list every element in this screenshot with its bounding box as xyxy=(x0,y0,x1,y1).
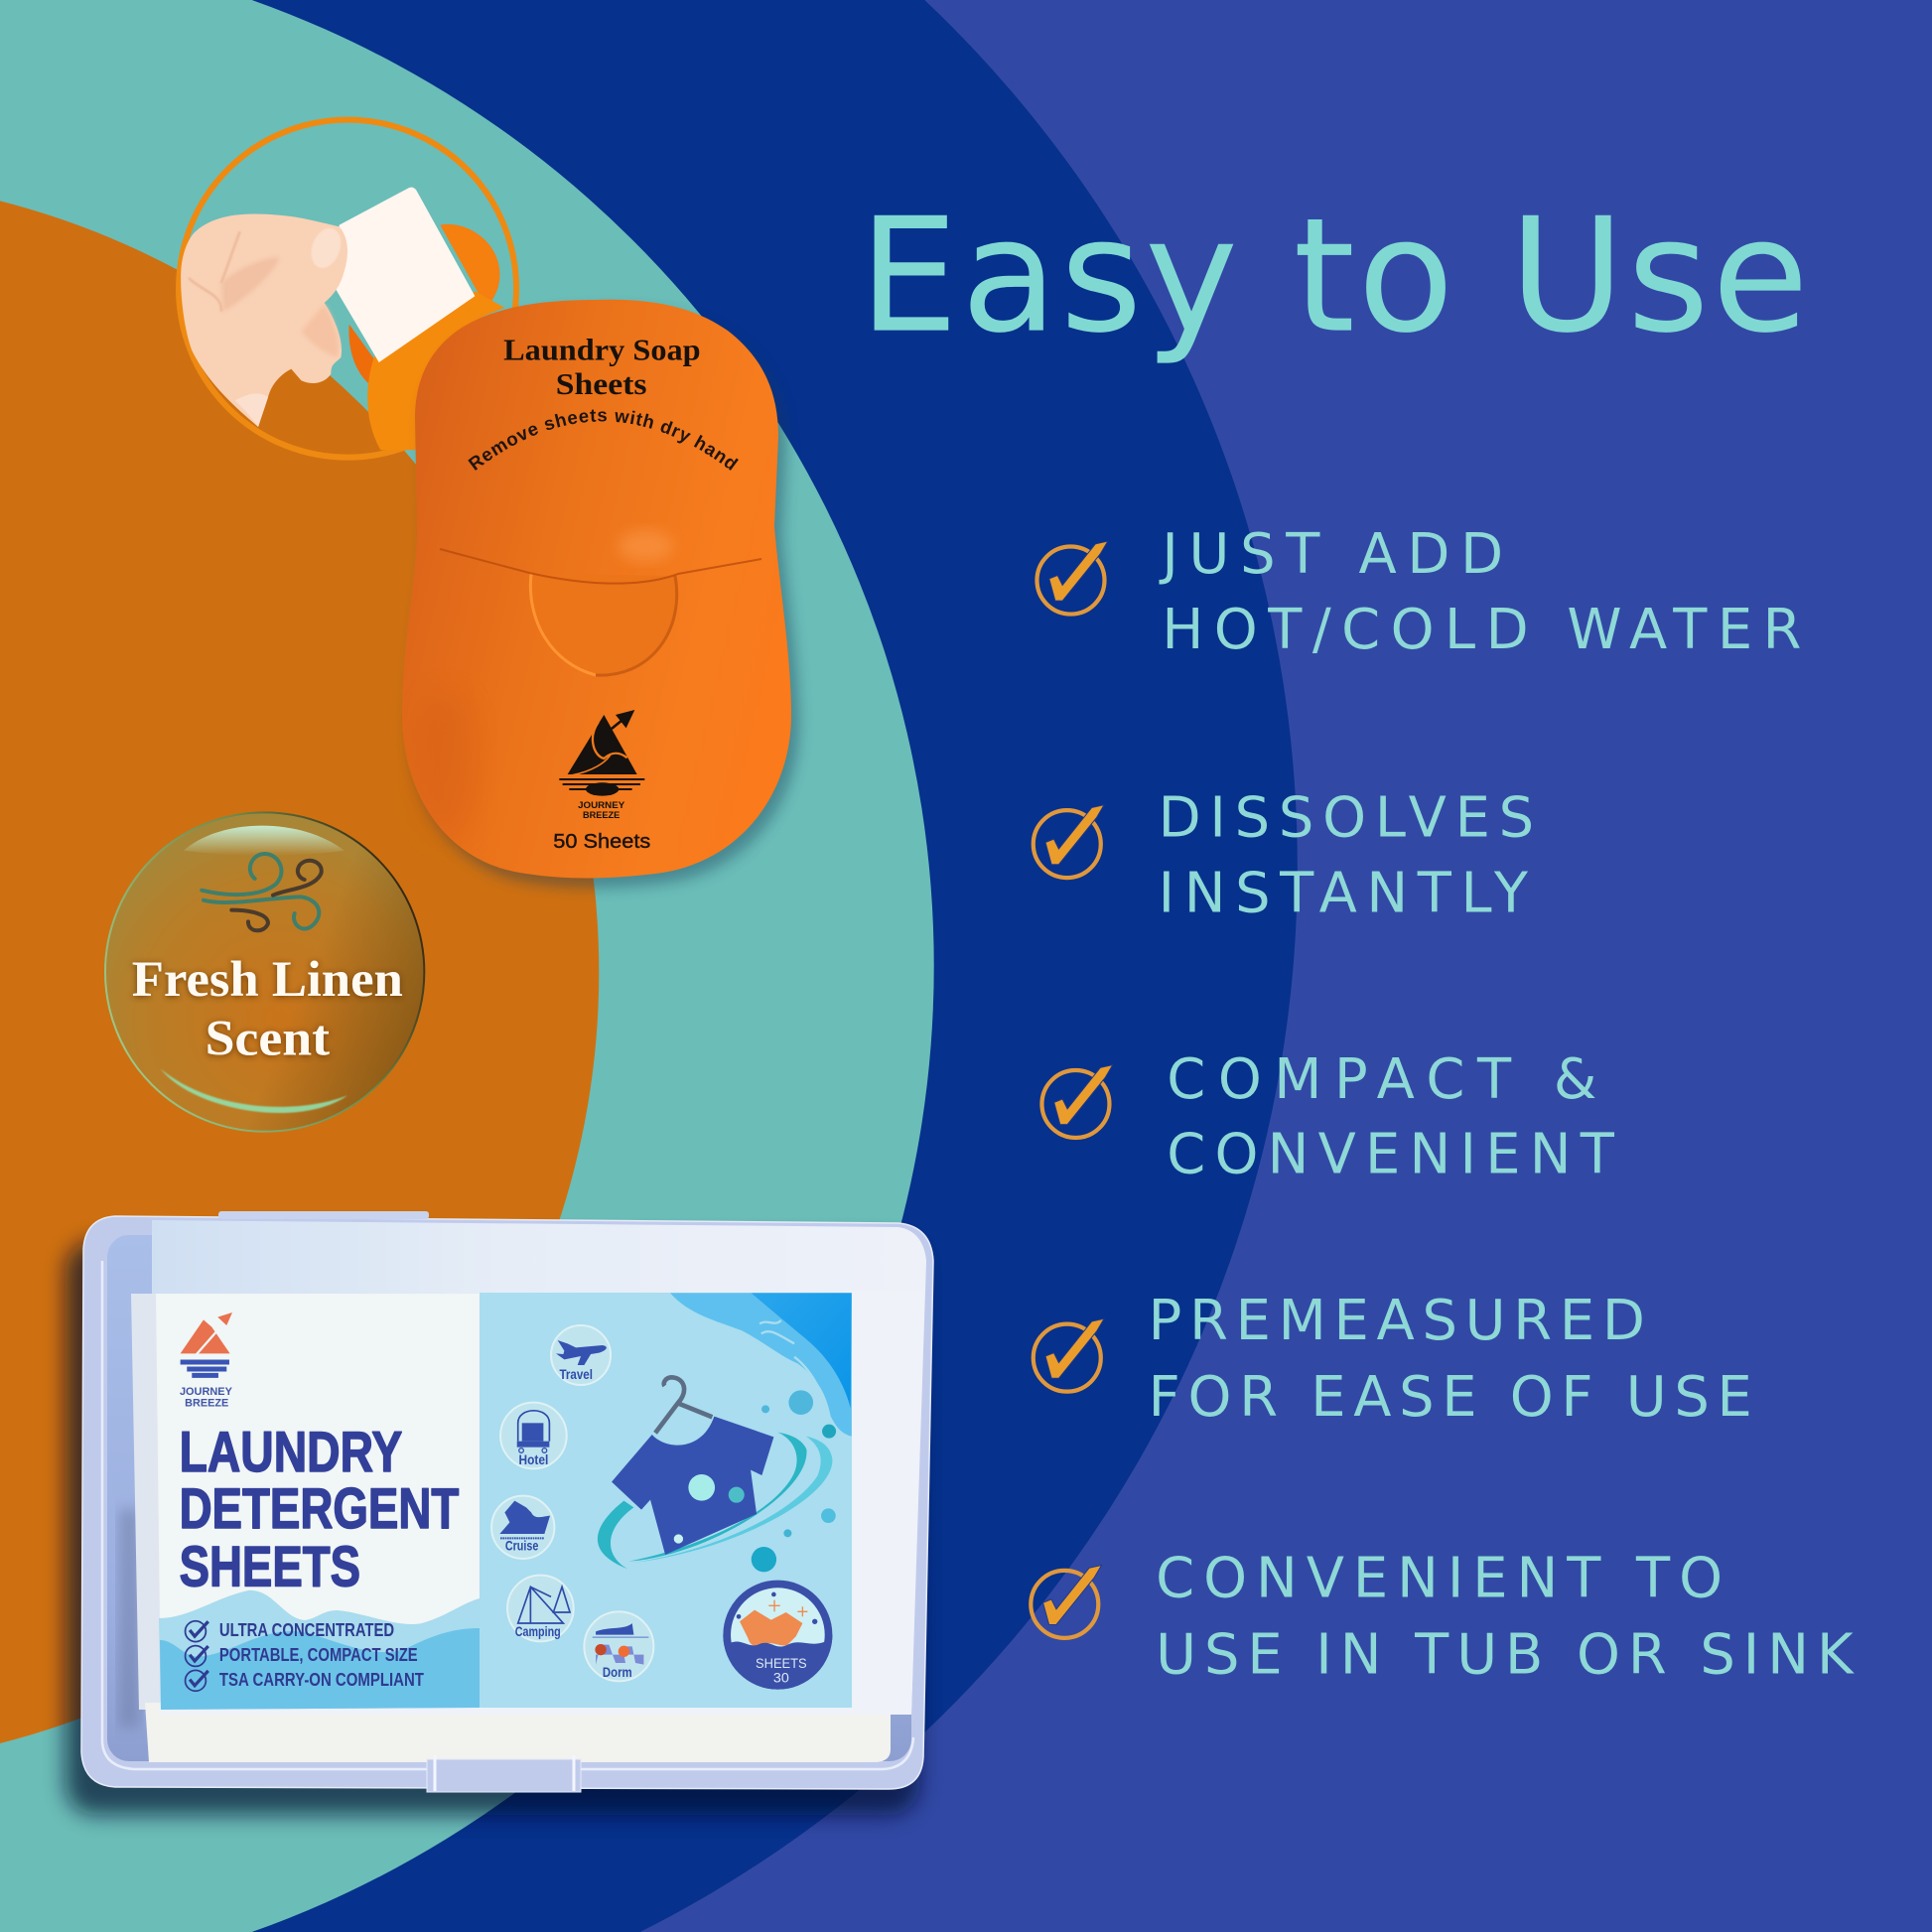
fresh linen scent badge xyxy=(105,812,424,1132)
box heading: SHEETS xyxy=(180,1535,360,1598)
bubble highlights xyxy=(161,826,347,1113)
brand name xyxy=(578,800,625,820)
label right panel xyxy=(480,1293,852,1708)
white sheets xyxy=(131,1220,926,1762)
benefit: premeasured: FOR EASE OF USE xyxy=(1149,1365,1752,1430)
box brand name xyxy=(180,1386,232,1410)
sheet count: 50 Sheets xyxy=(553,830,650,853)
fresh linen scent badge: Scent xyxy=(206,1011,330,1066)
label artwork xyxy=(491,1293,852,1681)
brand name: BREEZE xyxy=(583,810,620,820)
inset ring xyxy=(179,120,516,458)
benefit: compact and convenient: CONVENIENT xyxy=(1167,1122,1615,1186)
use case labels: Dorm xyxy=(603,1665,632,1680)
seal text xyxy=(756,1656,807,1687)
hand xyxy=(181,213,347,427)
box heading: DETERGENT xyxy=(180,1477,459,1541)
use case bubbles xyxy=(491,1325,653,1681)
benefit: compact and convenient xyxy=(1041,1047,1615,1186)
benefit: just add hot/cold water: JUST ADD xyxy=(1159,522,1503,587)
case body xyxy=(402,300,791,879)
label left panel xyxy=(156,1294,480,1710)
box feature list: TSA CARRY-ON COMPLIANT xyxy=(219,1669,424,1690)
orange soap sheet case xyxy=(401,300,806,897)
thumb notch xyxy=(530,574,677,675)
use case labels xyxy=(505,1367,632,1680)
box feature list xyxy=(219,1619,424,1690)
benefit: premeasured xyxy=(1034,1289,1752,1430)
box brand name: JOURNEY xyxy=(180,1386,232,1398)
use case labels: Cruise xyxy=(505,1538,539,1553)
badge disc xyxy=(105,812,424,1132)
box heading: LAUNDRY xyxy=(180,1421,402,1484)
curved instruction: Remove sheets with dry hand xyxy=(468,409,739,471)
t-shirt graphic xyxy=(598,1377,836,1572)
sheets count seal xyxy=(723,1581,832,1690)
benefits list xyxy=(1031,522,1855,1687)
box shadow xyxy=(66,1241,919,1815)
benefit: compact and convenient: COMPACT & xyxy=(1167,1047,1596,1112)
benefit: premeasured: PREMEASURED xyxy=(1149,1289,1645,1353)
box feature list: PORTABLE, COMPACT SIZE xyxy=(219,1644,418,1665)
open case lid xyxy=(348,224,504,450)
orange soap sheet case: Sheets xyxy=(556,366,647,401)
clasp xyxy=(427,1755,581,1792)
box heading xyxy=(180,1421,459,1598)
case label: Laundry Soap xyxy=(503,332,701,366)
benefit: just add hot/cold water: HOT/COLD WATER xyxy=(1162,598,1801,662)
seal text: SHEETS xyxy=(756,1656,807,1672)
benefit: tub or sink: USE IN TUB OR SINK xyxy=(1156,1622,1855,1687)
benefit: dissolves instantly: DISSOLVES xyxy=(1159,786,1534,851)
hand pulling a sheet inset xyxy=(179,120,516,458)
title: Easy to Use xyxy=(859,186,1809,368)
seal text: 30 xyxy=(773,1671,789,1687)
benefit: dissolves instantly xyxy=(1034,786,1534,925)
brand logo xyxy=(559,710,644,796)
water splash xyxy=(670,1293,852,1437)
brand name: JOURNEY xyxy=(578,800,625,810)
use case labels: Hotel xyxy=(518,1452,548,1467)
benefit: tub or sink xyxy=(1031,1546,1855,1687)
use case labels: Camping xyxy=(515,1624,561,1639)
benefit: dissolves instantly: INSTANTLY xyxy=(1159,861,1529,925)
lid edge xyxy=(440,549,761,584)
benefit: just add hot/cold water xyxy=(1036,522,1801,662)
soap sheet xyxy=(336,188,475,362)
box feature list: ULTRA CONCENTRATED xyxy=(219,1619,394,1640)
plastic case xyxy=(81,1211,933,1789)
use case labels: Travel xyxy=(559,1367,593,1382)
badge text: Fresh Linen xyxy=(132,952,403,1008)
laundry detergent sheets box xyxy=(66,1211,933,1815)
wind icon xyxy=(202,854,322,930)
box brand name: BREEZE xyxy=(185,1398,228,1410)
checkmarks xyxy=(186,1621,208,1691)
box mark xyxy=(181,1312,232,1375)
case shadow xyxy=(410,310,799,889)
benefit: tub or sink: CONVENIENT TO xyxy=(1156,1546,1723,1610)
